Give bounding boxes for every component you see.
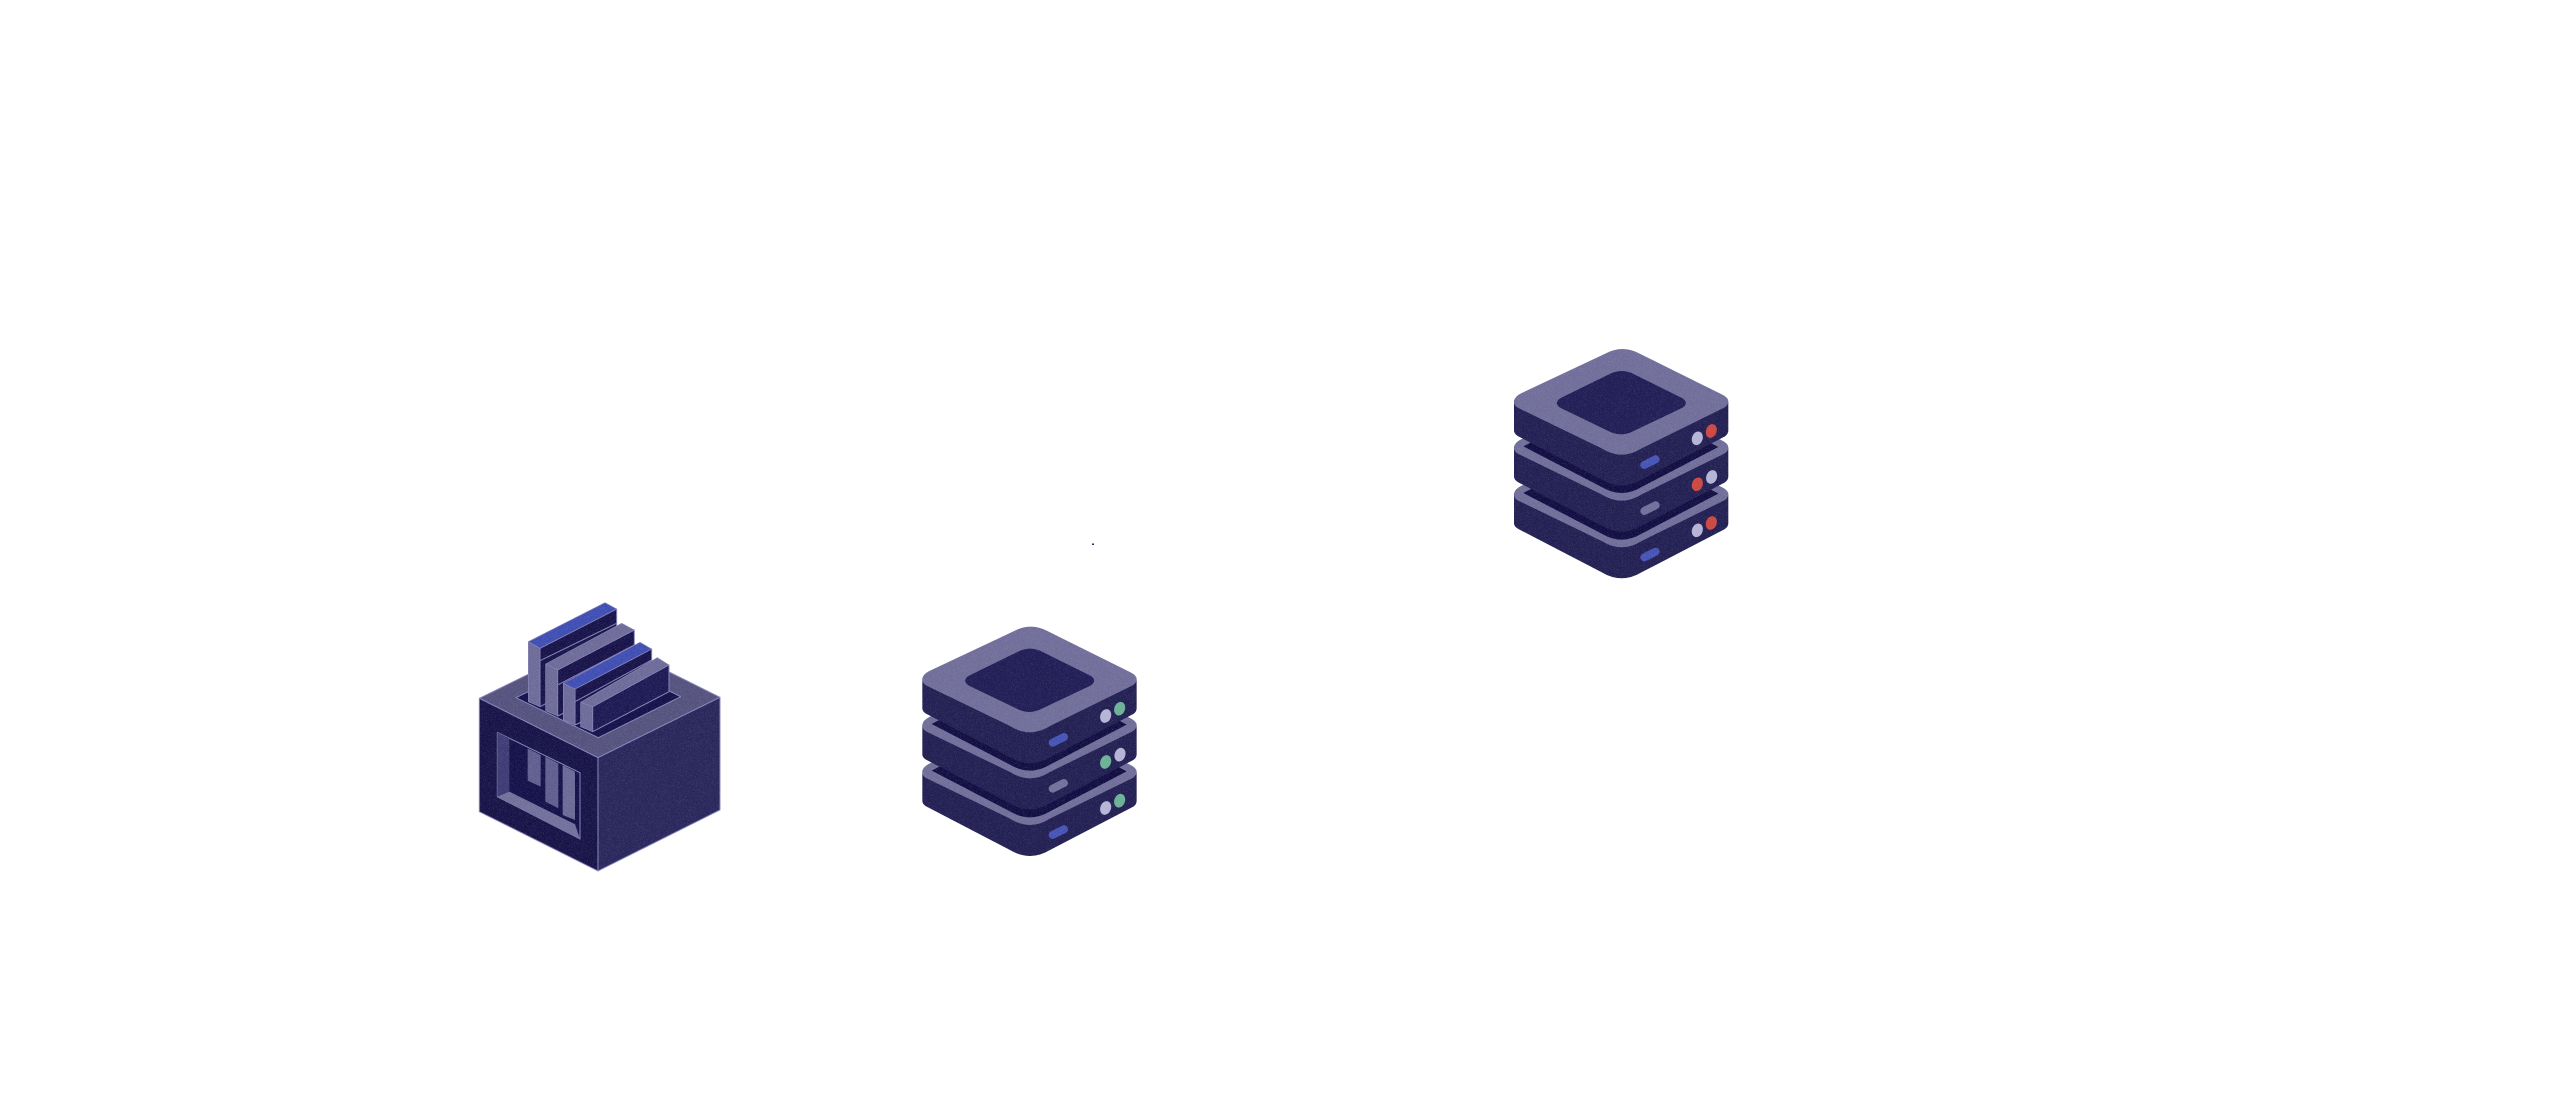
tiny dot	[1092, 544, 1094, 545]
server unit 2	[922, 673, 1137, 809]
book 2	[546, 623, 634, 716]
box window	[497, 732, 580, 839]
book 1	[528, 603, 617, 707]
server unit 3	[1514, 442, 1728, 578]
book 4	[581, 658, 669, 732]
server unit 1	[1514, 349, 1728, 486]
status lights and slots	[1053, 700, 1127, 835]
server unit 3	[922, 719, 1137, 856]
status lights and slots	[1644, 423, 1719, 557]
box opening	[516, 657, 681, 738]
box top face	[479, 638, 720, 758]
icon: server stack with red lights	[1514, 349, 1728, 578]
box left face	[479, 698, 598, 871]
server unit 1	[922, 627, 1137, 763]
book 3	[563, 642, 652, 725]
icon: server stack with green lights	[922, 627, 1137, 856]
icon: box of books	[479, 603, 720, 871]
box right face	[598, 697, 720, 871]
server unit 2	[1514, 395, 1728, 532]
